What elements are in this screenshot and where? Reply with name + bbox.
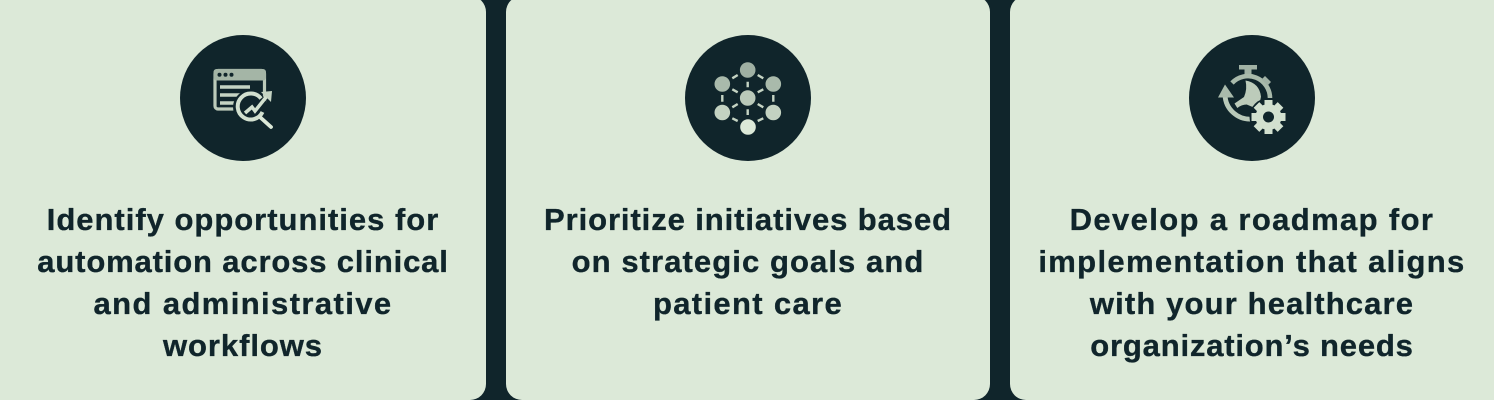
text: identify opportunities: Identify opportunities for xyxy=(47,202,439,237)
icon: stopwatch with arrow and gear xyxy=(1189,35,1315,161)
icon: network of nodes xyxy=(685,35,811,161)
text: identify opportunities: and administrative xyxy=(94,286,392,321)
text: develop roadmap xyxy=(1038,202,1466,363)
text: develop roadmap: Develop a roadmap for xyxy=(1070,202,1434,237)
text: identify opportunities: workflows xyxy=(163,328,323,363)
icon: dashboard with magnifier and trend arrow xyxy=(180,35,306,161)
text: identify opportunities xyxy=(37,202,449,363)
text: prioritize initiatives: patient care xyxy=(653,286,843,321)
text: develop roadmap: with your healthcare xyxy=(1090,286,1414,321)
text: develop roadmap: organization’s needs xyxy=(1090,328,1414,363)
panel: prioritize initiatives xyxy=(506,0,990,400)
panel: develop roadmap xyxy=(1010,0,1494,400)
panel: identify opportunities xyxy=(0,0,486,400)
text: prioritize initiatives: on strategic goals and xyxy=(572,244,924,279)
text: develop roadmap: implementation that aligns xyxy=(1038,244,1466,279)
text: identify opportunities: automation across clinical xyxy=(37,244,449,279)
text: prioritize initiatives xyxy=(544,202,952,321)
text: prioritize initiatives: Prioritize initiatives based xyxy=(544,202,952,237)
